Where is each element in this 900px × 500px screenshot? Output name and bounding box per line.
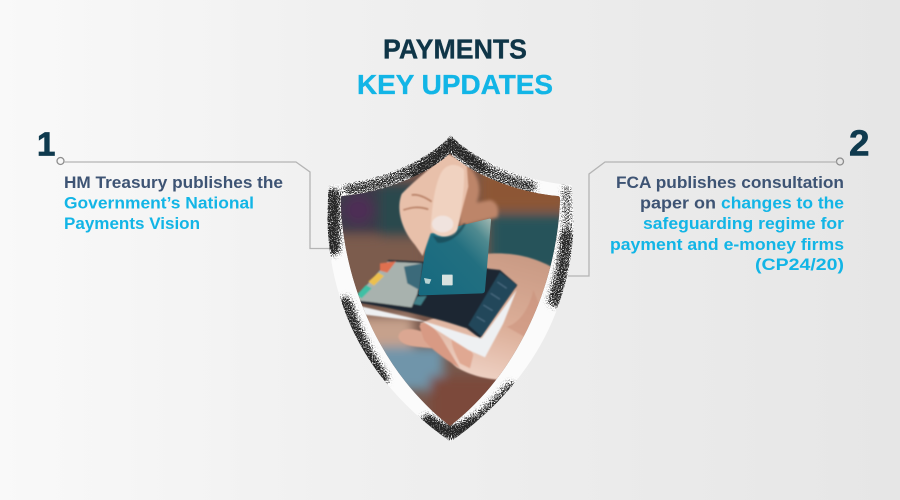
text block: update 2: paper on — [640, 194, 716, 212]
photo background — [333, 170, 567, 430]
text block: update 1: Payments Vision — [64, 214, 200, 233]
text block: update 2: (CP24/20) — [755, 255, 844, 274]
fist and thumb — [399, 153, 468, 256]
title — [357, 34, 553, 100]
back of upper hand and index finger — [457, 163, 498, 226]
shield white base — [327, 135, 574, 442]
text block: update 2: payment and e-money firms — [610, 235, 844, 254]
terminal side grip — [468, 272, 517, 337]
connector: update 1 — [57, 158, 332, 248]
text block: update 2: changes to the — [721, 194, 844, 212]
title: PAYMENTS — [383, 34, 527, 64]
connector: update 2 — [568, 158, 844, 276]
text block: update 2: safeguarding regime for — [643, 214, 844, 233]
lower hand — [398, 253, 557, 380]
payment terminal — [352, 260, 517, 357]
text block: update 1: Government’s National — [64, 194, 254, 212]
shield grunge border — [333, 144, 567, 432]
text block: update 1: HM Treasury publishes the — [64, 173, 283, 192]
text block: update 2 — [610, 173, 844, 274]
text block: update 2: FCA publishes consultation — [616, 173, 844, 192]
terminal white body — [353, 290, 517, 357]
number 2: 2 — [849, 122, 870, 164]
number 1: 1 — [37, 126, 55, 162]
terminal dark top — [352, 260, 517, 338]
payment card — [419, 219, 491, 295]
shield — [327, 135, 574, 442]
terminal keypad — [353, 262, 423, 307]
title: KEY UPDATES — [357, 69, 553, 100]
shield photo: card payment — [333, 150, 567, 430]
text block: update 1 — [64, 173, 283, 233]
